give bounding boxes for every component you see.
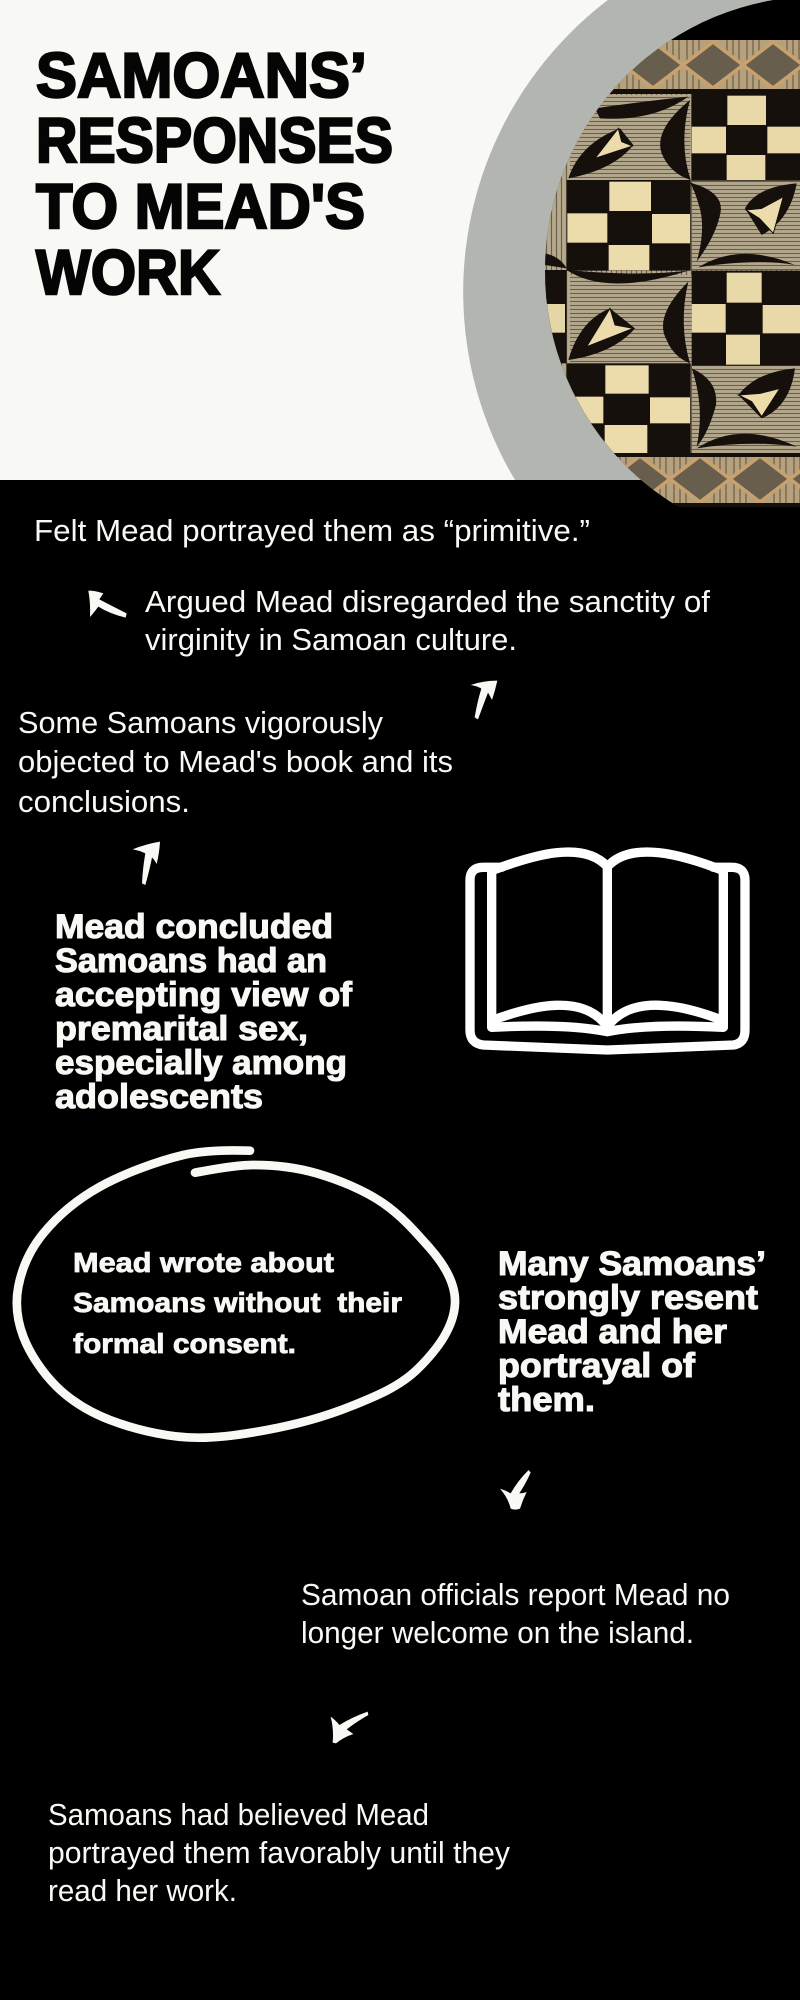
- title: SAMOANS’: [36, 41, 367, 111]
- text: felt primitive: Felt Mead portrayed them as “primitive.”: [34, 514, 590, 548]
- text: no longer welcome: [301, 1578, 730, 1650]
- text: without consent: Samoans without their: [73, 1287, 402, 1318]
- text: Mead concluded: Mead concluded: [55, 908, 333, 946]
- text: Mead concluded: premarital sex,: [55, 1010, 308, 1048]
- checker: lower left: [567, 363, 691, 454]
- text: believed favorably: portrayed them favorably until they: [48, 1836, 511, 1870]
- text: Mead concluded: [55, 908, 353, 1116]
- decorative grey circle: [463, 0, 800, 480]
- checker: top right: [692, 93, 800, 181]
- text: believed favorably: [48, 1798, 511, 1908]
- text: strongly resent: Mead and her: [498, 1313, 727, 1351]
- text: vigorous objections: conclusions.: [18, 785, 190, 819]
- text: Mead concluded: accepting view of: [55, 976, 353, 1014]
- text: vigorous objections: [18, 706, 453, 819]
- text: no longer welcome: longer welcome on the island.: [301, 1616, 694, 1650]
- text: vigorous objections: objected to Mead's book and its: [18, 745, 453, 779]
- text: believed favorably: Samoans had believed Mead: [48, 1798, 429, 1832]
- text: without consent: Mead wrote about: [73, 1247, 334, 1278]
- panel: cream header band: [0, 0, 800, 480]
- text: vigorous objections: Some Samoans vigorously: [18, 706, 384, 740]
- text: strongly resent: Many Samoans’: [498, 1245, 766, 1283]
- arrow: up-right upper: [471, 681, 497, 719]
- text: sanctity of virginity: virginity in Samoan culture.: [145, 623, 517, 657]
- icon: open book: [470, 852, 745, 1050]
- text: believed favorably: read her work.: [48, 1874, 237, 1908]
- callout: hand-drawn circle: [17, 1150, 455, 1438]
- text: strongly resent: portrayal of: [498, 1347, 696, 1385]
- title: RESPONSES: [36, 106, 393, 176]
- arrow: up-right lower: [133, 842, 160, 885]
- text: strongly resent: strongly resent: [498, 1279, 758, 1317]
- text: without consent: formal consent.: [73, 1328, 296, 1359]
- text: Mead concluded: especially among: [55, 1044, 347, 1082]
- arrow: up-left: [88, 591, 127, 618]
- text: Mead concluded: adolescents: [55, 1078, 263, 1116]
- arrow: down-left: [331, 1712, 368, 1743]
- title: [36, 41, 393, 308]
- cream arrow inlays: [587, 128, 783, 417]
- text: Mead concluded: Samoans had an: [55, 942, 327, 980]
- arrow: down: [500, 1470, 531, 1510]
- image: tapa cloth pattern in circle: [540, 0, 800, 520]
- text: sanctity of virginity: [145, 585, 711, 657]
- title: WORK: [36, 238, 220, 308]
- text: strongly resent: them.: [498, 1381, 595, 1419]
- checker: lower right: [692, 271, 800, 366]
- text: sanctity of virginity: Argued Mead disregarded the sanctity of: [145, 585, 711, 619]
- text: no longer welcome: Samoan officials report Mead no: [301, 1578, 730, 1612]
- text: without consent: [73, 1247, 402, 1359]
- text: strongly resent: [498, 1245, 766, 1419]
- title: TO MEAD'S: [36, 172, 365, 242]
- leaf shapes: [545, 97, 797, 448]
- checker: middle left: [567, 180, 691, 271]
- checker: far left sliver: [545, 270, 567, 363]
